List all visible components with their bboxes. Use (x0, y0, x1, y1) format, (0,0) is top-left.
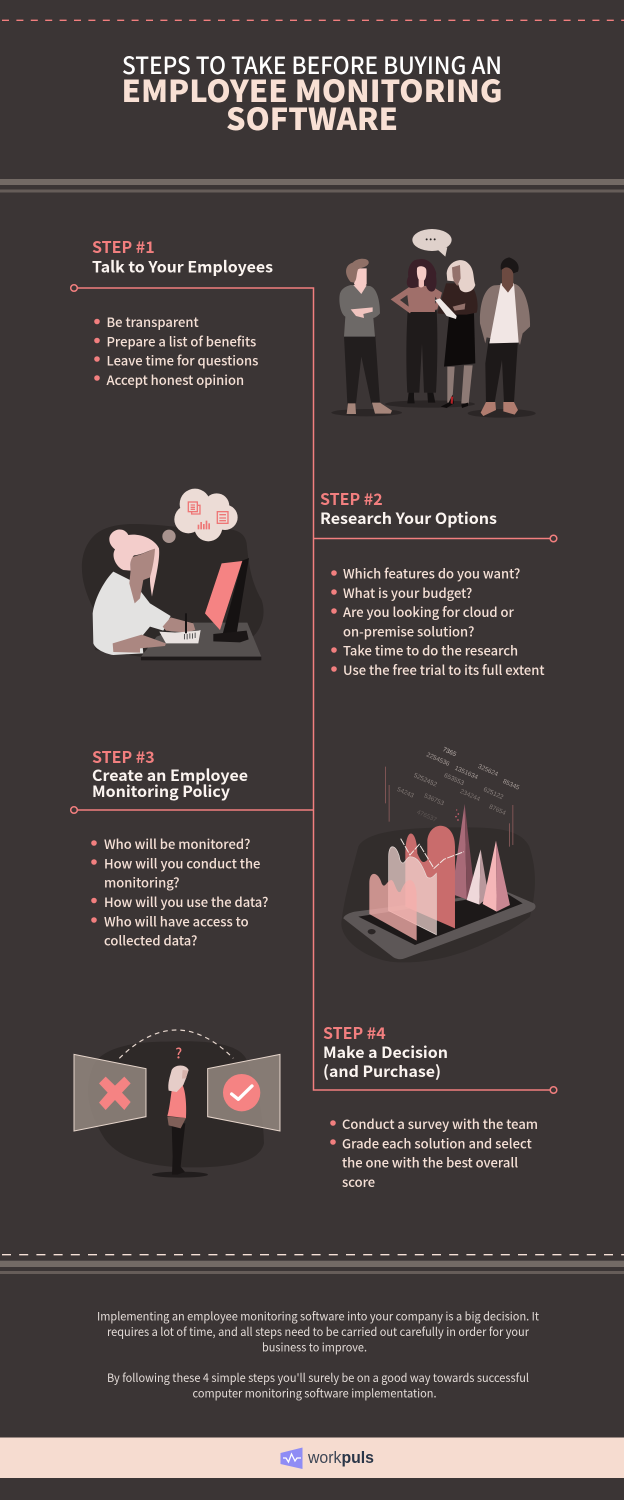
step 2 heading: Research Your Options (320, 507, 497, 529)
step 2 heading: STEP #2 (320, 486, 383, 510)
step 3 list: How will you use the data? (104, 892, 268, 911)
man in jacket (480, 257, 530, 416)
floating numbers: 54243 (396, 786, 415, 800)
step 3 heading (92, 744, 248, 802)
step 2 list (331, 564, 545, 679)
closing text: business to improve. (262, 1340, 367, 1356)
step 2 heading (320, 486, 497, 529)
closing text: requires a lot of time, and all steps need to be carried out carefully in order for your (107, 1324, 530, 1340)
step 3 heading: Monitoring Policy (92, 780, 230, 802)
timeline connector (71, 285, 557, 1093)
floating numbers: 625122 (482, 786, 505, 801)
step 4 list: Grade each solution and select (342, 1133, 532, 1152)
step 1 heading (92, 234, 273, 278)
step 4 list: the one with the best overall (342, 1153, 518, 1172)
step 1 heading: Talk to Your Employees (92, 256, 273, 278)
step 3 list: collected data? (104, 931, 197, 950)
panel: step 4 (323, 1020, 538, 1191)
step 1 heading: STEP #1 (92, 234, 155, 258)
step 1 list: Be transparent (106, 312, 199, 331)
footer band with logo (0, 1438, 624, 1478)
step 3 list: How will you conduct the (104, 853, 260, 872)
floating numbers: 653553 (443, 772, 465, 787)
step 4 list (330, 1114, 538, 1191)
step 4 heading: STEP #4 (323, 1020, 386, 1044)
speech bubble (412, 229, 452, 257)
right panel (208, 1054, 280, 1131)
step 2 list: Use the free trial to its full extent (343, 660, 545, 679)
floating numbers: 1351634 (454, 765, 479, 781)
step 3 list (91, 834, 268, 950)
floating numbers: 234244 (459, 788, 481, 803)
closing text (97, 1308, 540, 1402)
step 1 list: Prepare a list of benefits (106, 331, 256, 350)
step 4 heading: (and Purchase) (323, 1060, 441, 1082)
tablet (343, 892, 536, 959)
step 3 list: monitoring? (104, 873, 180, 892)
step 3 list: Who will have access to (104, 911, 249, 930)
floating numbers: 325624 (477, 763, 499, 778)
panel: step 1 (92, 234, 273, 389)
step 3 list: Who will be monitored? (104, 834, 250, 853)
step 2 list: Are you looking for cloud or (343, 602, 515, 621)
illustration: woman deciding between wrong and right (74, 1030, 280, 1178)
title (122, 47, 503, 139)
panel: step 3 (91, 744, 268, 950)
woman with dark hair (391, 259, 442, 403)
woman writing (93, 530, 201, 655)
step 4 heading (323, 1020, 448, 1082)
man with crossed arms (339, 259, 392, 414)
woman figure (152, 1065, 208, 1178)
illustration: team of employees talking (331, 229, 536, 418)
step 2 list: Which features do you want? (343, 564, 520, 582)
closing text: Implementing an employee monitoring software into your company is a big decision. It (97, 1308, 540, 1324)
floating numbers: 536753 (423, 792, 445, 808)
step 1 list: Leave time for questions (106, 351, 258, 370)
step 3 heading: STEP #3 (92, 744, 155, 768)
floating numbers: 85345 (502, 778, 521, 792)
workpuls logo (280, 1448, 374, 1469)
closing text: computer monitoring software implementation. (192, 1386, 436, 1402)
floating numbers: 2254536 (425, 751, 451, 768)
title: SOFTWARE (226, 95, 398, 139)
step 4 list: Conduct a survey with the team (342, 1114, 538, 1133)
illustration: data charts on a tablet (341, 746, 536, 962)
step 1 list (94, 312, 258, 389)
panel: step 2 (320, 486, 545, 679)
area charts (369, 826, 464, 941)
closing text: By following these 4 simple steps you'll surely be on a good way towards successful (107, 1370, 529, 1386)
question mark: ? (175, 1044, 182, 1064)
step 2 list: on-premise solution? (343, 621, 474, 640)
floating numbers (396, 746, 521, 824)
thought cloud (162, 489, 238, 543)
illustration: woman researching at computer (82, 489, 264, 660)
monitor (205, 558, 249, 642)
floating numbers: 7365 (442, 746, 458, 758)
step 4 heading: Make a Decision (323, 1041, 448, 1063)
desk (141, 623, 261, 660)
floating numbers: 87654 (488, 803, 507, 817)
step 2 list: Take time to do the research (343, 641, 518, 660)
floating numbers: 5252452 (413, 772, 438, 789)
blonde woman with tablet (435, 260, 478, 408)
workpuls logo: workpuls (307, 1448, 374, 1467)
step 4 list: score (342, 1172, 375, 1191)
cone charts (452, 804, 510, 912)
step 2 list: What is your budget? (343, 583, 472, 602)
title: STEPS TO TAKE BEFORE BUYING AN (122, 47, 502, 81)
step 3 heading: Create an Employee (92, 764, 248, 786)
title: EMPLOYEE MONITORING (122, 67, 503, 111)
wrong panel (74, 1054, 146, 1131)
step 1 list: Accept honest opinion (106, 370, 244, 389)
floating numbers: 476537 (416, 809, 438, 824)
